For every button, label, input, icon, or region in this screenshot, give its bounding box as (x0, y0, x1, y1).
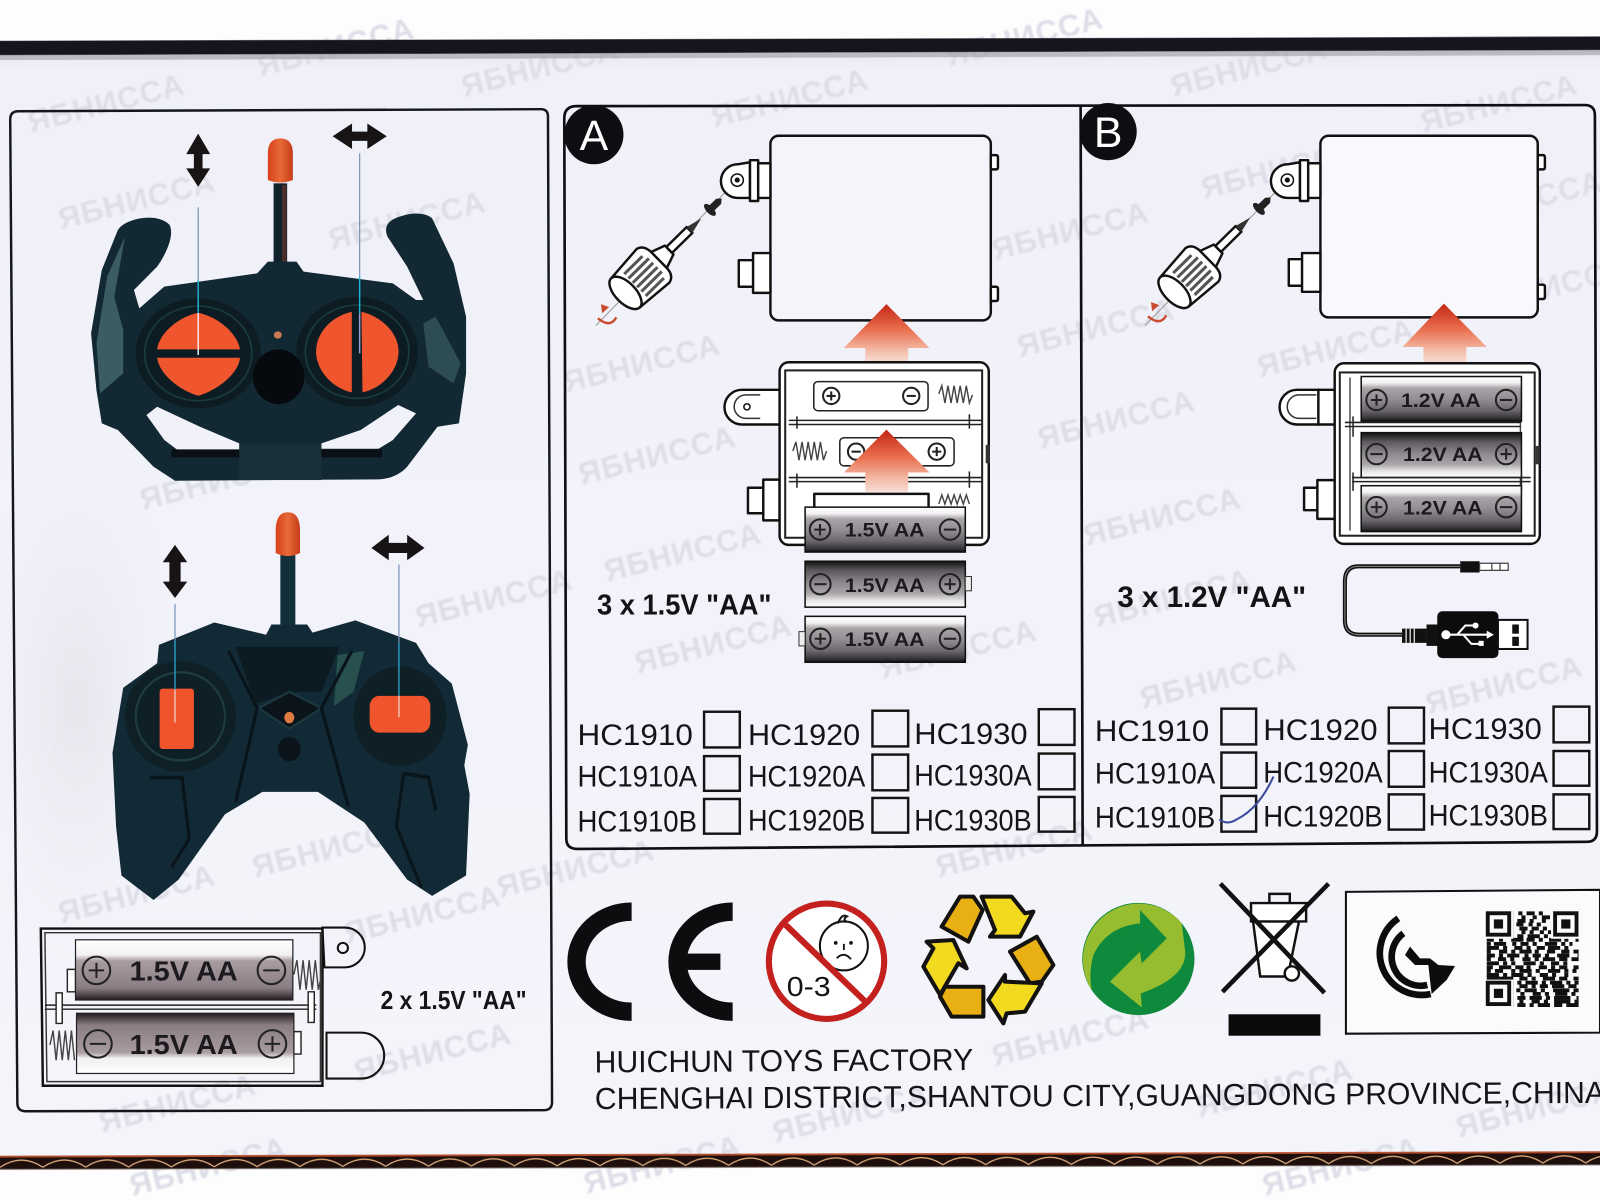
label: 3 x 1.5V AA: 3 x 1.5V "AA" (597, 589, 771, 621)
section B: battery holder with batteries (1280, 363, 1540, 544)
model checklist: section B: HC1910A (1095, 758, 1216, 791)
model checklist: section A: HC1910 (578, 719, 693, 752)
model checklist: section B: HC1930B (1429, 800, 1548, 833)
icon: not for ages 0-3: 0-3 (787, 971, 831, 1002)
section A: batteries: 1.5V AA (845, 575, 924, 597)
watermarks: ЯБНИССА (601, 517, 765, 588)
model checklist: section A: HC1920B (748, 805, 865, 838)
model checklist: section B: HC1910 (1095, 715, 1209, 748)
icon: CE mark (577, 912, 733, 1012)
model checklist: section A: HC1920 (748, 719, 860, 752)
panel: battery options A and B (564, 103, 1597, 849)
watermarks: ЯБНИССА (779, 144, 943, 216)
watermarks: ЯБНИССА (560, 328, 724, 400)
model checklist: section A (578, 709, 1074, 839)
watermarks: ЯБНИССА (55, 164, 219, 236)
icon: left-right arrow, top remote (333, 123, 387, 149)
model checklist: section A: HC1910A (578, 761, 697, 794)
icon: green dot (1082, 903, 1194, 1015)
watermarks: ЯБНИССА (55, 858, 219, 930)
manufacturer address (594, 1039, 1600, 1116)
watermarks: ЯБНИССА (580, 1129, 744, 1200)
cardboard bottom edge (0, 1152, 1600, 1169)
logo mark (1380, 918, 1455, 995)
watermarks: ЯБНИССА (1090, 562, 1255, 634)
watermarks: ЯБНИССА (136, 445, 301, 517)
label: 2 x 1.5V AA: 2 x 1.5V "AA" (381, 987, 527, 1015)
watermarks: ЯБНИССА (325, 185, 489, 257)
watermarks: ЯБНИССА (575, 420, 739, 491)
watermarks: ЯБНИССА (932, 812, 1097, 884)
manufacturer address: HUICHUN TOYS FACTORY (594, 1043, 973, 1079)
icon: recycling arrows (923, 897, 1053, 1023)
watermarks: ЯБНИССА (1136, 644, 1301, 716)
section B: battery holder with batteries: 1.2V AA (1403, 444, 1483, 466)
model checklist: section A: HC1930A (914, 760, 1032, 793)
model checklist: section B: HC1910B (1095, 802, 1215, 835)
battery holder: 2 x AA: 1.5V AA (130, 956, 238, 987)
watermarks: ЯБНИССА (1167, 32, 1331, 104)
section A: batteries (799, 507, 971, 662)
watermarks: ЯБНИССА (24, 68, 188, 139)
icon: crossed-out bin (1220, 884, 1329, 1036)
model checklist: section B: HC1920A (1263, 757, 1383, 790)
bottom remote: gamepad style (113, 512, 470, 900)
model checklist: section A: HC1930B (914, 805, 1032, 838)
battery holder: 2 x AA (41, 928, 384, 1086)
section A: batteries: 1.5V AA (845, 629, 924, 651)
watermarks: ЯБНИССА (1417, 68, 1581, 139)
watermarks: ЯБНИССА (351, 1017, 515, 1088)
section B: screwdriver and screw (1145, 181, 1287, 326)
watermarks: ЯБНИССА (340, 879, 505, 951)
badge: A: A (580, 112, 609, 160)
model checklist: section B: HC1930A (1429, 757, 1548, 790)
watermarks: ЯБНИССА (1422, 649, 1586, 721)
section B: battery holder with batteries: 1.2V AA (1401, 390, 1481, 412)
section B: battery holder with batteries: 1.2V AA (1403, 497, 1483, 519)
section A: batteries: 1.5V AA (845, 520, 924, 542)
label: 3 x 1.2V AA: 3 x 1.2V "AA" (1117, 581, 1306, 614)
pen check mark (1219, 777, 1273, 822)
watermarks: ЯБНИССА (458, 32, 622, 104)
model checklist: section B: HC1930 (1429, 713, 1542, 746)
watermarks: ЯБНИССА (1192, 1052, 1357, 1124)
company logo and QR box (1346, 890, 1600, 1034)
badge: B: B (1094, 109, 1122, 157)
section A: screwdriver and screw (596, 182, 738, 326)
watermarks: ЯБНИССА (769, 251, 933, 323)
icon: up-down arrow, bottom remote (163, 545, 187, 598)
model checklist: section B: HC1920B (1263, 801, 1383, 834)
section A: second upward arrow (844, 430, 930, 492)
icon: up-down arrow, top remote (186, 134, 210, 187)
icon: not for ages 0-3 (769, 904, 884, 1019)
icon: left-right arrow, bottom remote (371, 535, 424, 560)
section B: cover plate (1271, 136, 1545, 317)
watermarks: ЯБНИССА (249, 812, 413, 884)
watermarks: ЯБНИССА (1254, 312, 1418, 384)
watermarks: ЯБНИССА (988, 1001, 1153, 1073)
section B: upward arrow (1403, 304, 1487, 362)
watermarks: ЯБНИССА (1014, 292, 1178, 364)
watermarks: ЯБНИССА (412, 562, 576, 634)
watermarks: ЯБНИССА (493, 833, 658, 905)
watermarks: ЯБНИССА (876, 613, 1040, 685)
section A: cover plate (721, 136, 998, 320)
box top edge (0, 37, 1600, 60)
section A: upward arrow (844, 304, 930, 362)
model checklist: section A: HC1910B (578, 806, 697, 839)
watermarks: ЯБНИССА (1034, 384, 1199, 456)
watermarks: ЯБНИССА (708, 62, 872, 134)
model checklist: section B: HC1920 (1263, 714, 1378, 747)
watermarks: ЯБНИССА (988, 195, 1153, 267)
panel: transmitter controls (10, 109, 552, 1111)
watermarks: ЯБНИССА (96, 1068, 260, 1139)
battery holder: 2 x AA: 1.5V AA (130, 1029, 238, 1060)
section A: battery holder (724, 362, 990, 545)
watermarks: ЯБНИССА (1198, 134, 1362, 206)
model checklist: section A: HC1920A (748, 761, 866, 794)
QR code (1486, 911, 1580, 1008)
manufacturer address: CHENGHAI DISTRICT,SHANTOU CITY,GUANGDONG PROVINCE,CHINA (595, 1076, 1600, 1116)
watermarks: ЯБНИССА (631, 608, 795, 680)
model checklist: section B (1095, 707, 1589, 835)
badge: B (1080, 103, 1137, 160)
badge: A (564, 105, 623, 164)
model checklist: section A: HC1930 (914, 718, 1028, 751)
watermarks: ЯБНИССА (769, 1078, 933, 1150)
watermarks: ЯБНИССА (1080, 481, 1244, 553)
section B: USB charging cable (1345, 561, 1528, 658)
watermarks: ЯБНИССА (942, 1, 1107, 73)
watermarks: ЯБНИССА (254, 11, 418, 83)
top remote: steering wheel style (91, 138, 466, 481)
